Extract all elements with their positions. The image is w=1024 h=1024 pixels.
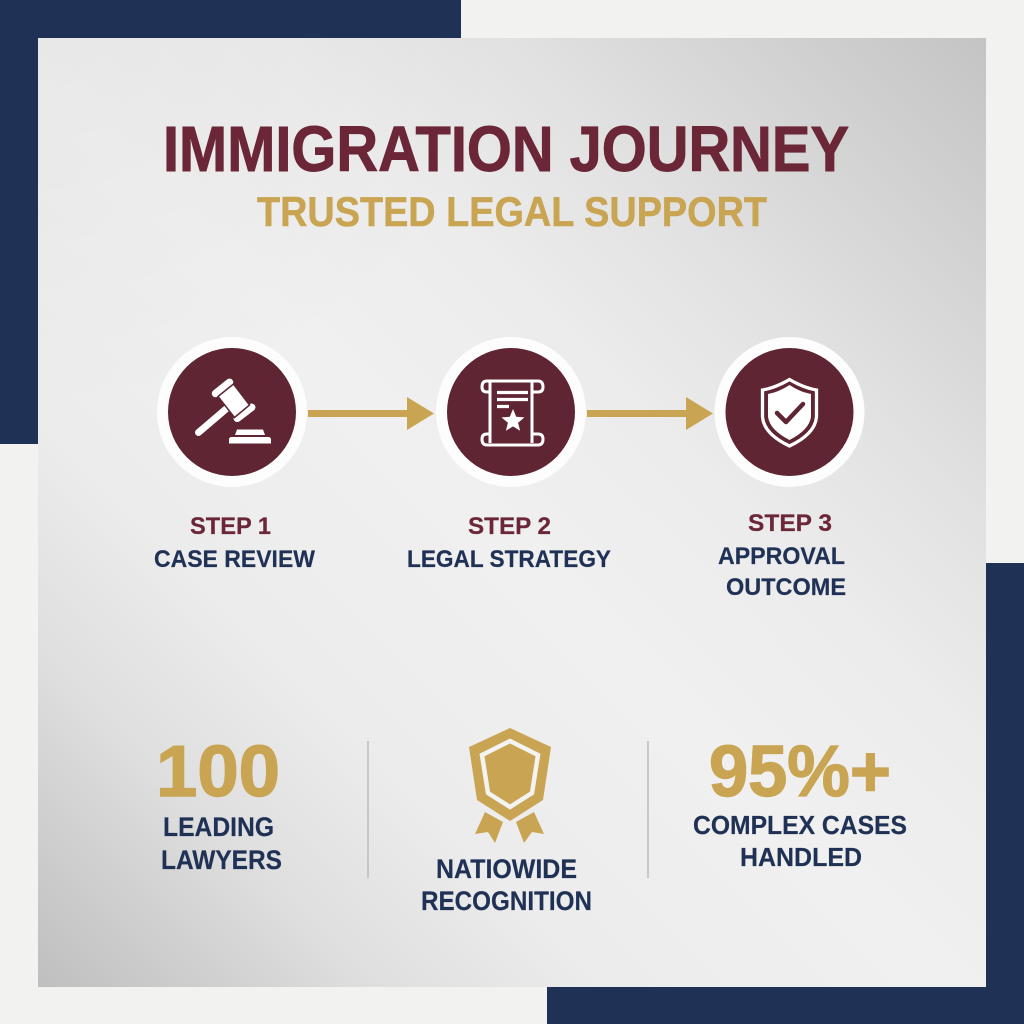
stat: 95%+ complex cases handled	[693, 732, 907, 872]
stat: 100 leading lawyers: LAWYERS	[161, 845, 282, 875]
step 1 icon: gavel in circle	[157, 337, 307, 487]
arrow: step 2 to step 3	[587, 397, 713, 430]
stat: nationwide recognition badge: NATIOWIDE	[436, 854, 577, 884]
step 2 label: LEGAL STRATEGY	[407, 546, 611, 573]
step 1 label: CASE REVIEW	[154, 546, 316, 573]
step 1 label	[154, 513, 316, 573]
step 3 label: APPROVAL	[718, 543, 845, 570]
stat: 100 leading lawyers: LEADING	[163, 812, 274, 842]
stat: 95%+ complex cases handled: COMPLEX CASES	[693, 812, 907, 840]
process steps	[154, 337, 864, 601]
stat: 95%+ complex cases handled: 95%+	[709, 732, 891, 812]
icon: gold hexagon award badge	[469, 728, 551, 843]
stat: 100 leading lawyers	[156, 732, 282, 875]
arrow: step 1 to step 2	[308, 397, 434, 430]
step 1 label: STEP 1	[190, 513, 271, 540]
navy corner frame: top left	[0, 0, 461, 444]
title: IMMIGRATION JOURNEY	[163, 113, 849, 185]
stat: nationwide recognition badge	[421, 728, 592, 916]
step 3 icon: shield with check in circle	[714, 337, 864, 487]
step 3 label: OUTCOME	[726, 574, 846, 601]
step 3 label	[718, 510, 846, 601]
step 2 icon: scroll with star in circle	[436, 337, 586, 487]
subtitle: TRUSTED LEGAL SUPPORT	[257, 188, 767, 235]
step 2 label	[407, 513, 611, 573]
step 2 label: STEP 2	[468, 513, 551, 540]
stat: 95%+ complex cases handled: HANDLED	[740, 844, 862, 872]
navy corner frame: bottom right	[547, 563, 1024, 1024]
step 3 label: STEP 3	[748, 510, 832, 537]
stat: nationwide recognition badge: RECOGNITION	[421, 886, 592, 916]
stat: 100 leading lawyers: 100	[156, 732, 280, 812]
